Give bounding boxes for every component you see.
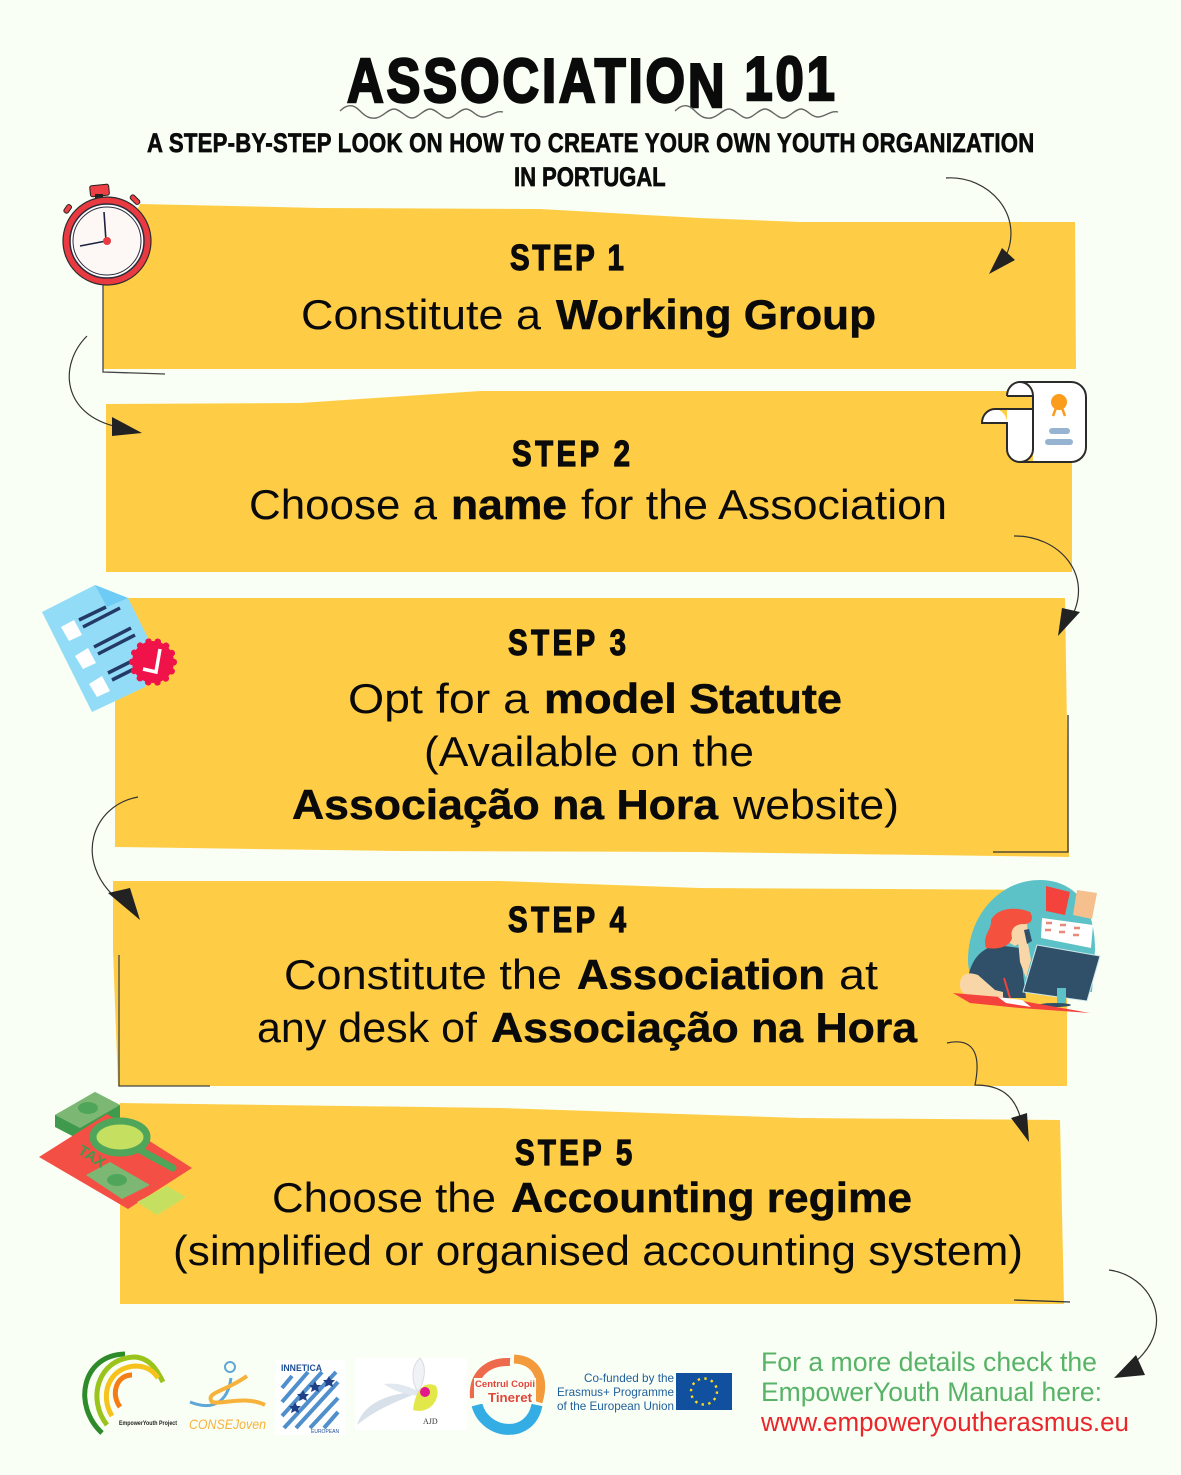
panel: step 4: Associação na Hora [491, 1004, 918, 1051]
panel: step 1: Working Group [556, 291, 876, 338]
panel: step 4: Constitute the [284, 951, 562, 998]
panel: step 3: model Statute [544, 675, 842, 722]
icon: scroll certificate [982, 382, 1086, 462]
icon: tax book with magnifier [39, 1092, 192, 1215]
logo: AJD [355, 1358, 467, 1430]
arrow: step 2 to step 3 [1014, 536, 1080, 636]
logo: EmpowerYouth Project: EmpowerYouth Project [119, 1421, 177, 1427]
logo: Centrul de Copii si Tineret: Tineret [488, 1390, 533, 1405]
panel: step 5 [120, 1103, 1070, 1304]
icon: stopwatch [63, 184, 151, 285]
panel: step 2: Choose a [249, 481, 438, 528]
panel: step 3 [115, 598, 1069, 857]
title [340, 45, 838, 121]
panel: step 1: Constitute a [301, 291, 542, 338]
title: ASSOCIATIO [347, 47, 685, 116]
panel: step 4: Association [577, 951, 825, 998]
panel: step 3: Opt for a [348, 675, 530, 722]
arrow: step 3 to step 4 [92, 797, 140, 920]
panel: step 3: STEP 3 [508, 622, 626, 663]
arrow: title to step 1 [946, 178, 1015, 274]
panel: step 2: STEP 2 [512, 433, 630, 474]
logo: Centrul de Copii si Tineret: Centrul Copii [475, 1379, 535, 1389]
panel: step 4: any desk of [257, 1004, 477, 1051]
arrow: step 5 to footer [1109, 1270, 1157, 1378]
panel: step 2: name [451, 481, 567, 528]
footer note: www.empoweryoutherasmus.eu [760, 1407, 1129, 1437]
logo: Innetica: INNETICA [281, 1363, 322, 1373]
panel: step 5: Accounting regime [511, 1174, 912, 1221]
logo: Erasmus+ co-funded: Erasmus+ Programme [557, 1385, 674, 1399]
icon: woman at desk [953, 880, 1100, 1013]
subtitle: A STEP-BY-STEP LOOK ON HOW TO CREATE YOUR OWN YOUTH ORGANIZATION [147, 129, 1034, 159]
panel: step 3: (Available on the [424, 728, 754, 775]
logo: Consejoven: CONSEJoven [189, 1416, 266, 1432]
panel: step 5: STEP 5 [515, 1132, 632, 1173]
logo: Erasmus+ co-funded [557, 1371, 732, 1413]
title: N [688, 52, 725, 121]
subtitle: IN PORTUGAL [514, 163, 666, 193]
footer note: EmpowerYouth Manual here: [761, 1377, 1102, 1407]
footer note [760, 1347, 1129, 1437]
logo: Erasmus+ co-funded: Co-funded by the [584, 1371, 674, 1385]
panel: step 2: for the Association [581, 481, 947, 528]
icon: checklist with badge [42, 585, 174, 712]
panel: step 3: website) [732, 781, 899, 828]
panel: step 1 [103, 204, 1076, 374]
icon: tax book with magnifier: TAX [75, 1142, 108, 1172]
arrow: step 4 to step 5 [947, 1042, 1029, 1142]
footer note: For a more details check the [761, 1347, 1097, 1377]
logo: Centrul de Copii si Tineret [474, 1359, 541, 1429]
logo: Innetica [275, 1360, 345, 1435]
panel: step 4: STEP 4 [508, 899, 627, 940]
arrow: step 1 to step 2 [69, 336, 142, 436]
logo: AJD: AJD [423, 1417, 438, 1426]
panel: step 5: (simplified or organised accounting system) [173, 1227, 1023, 1274]
panel: step 4: at [839, 951, 878, 998]
logo: Innetica: EUROPEAN [311, 1429, 339, 1435]
panel: step 4 [113, 881, 1067, 1086]
logo: Consejoven [189, 1362, 266, 1432]
panel: step 2 [106, 391, 1072, 572]
subtitle [147, 129, 1034, 193]
panel: step 5: Choose the [272, 1174, 496, 1221]
panel: step 3: Associação na Hora [292, 781, 719, 828]
panel: step 1: STEP 1 [510, 237, 624, 278]
logo: Erasmus+ co-funded: of the European Union [557, 1399, 674, 1413]
title: 101 [727, 45, 835, 114]
logo: EmpowerYouth Project [85, 1354, 177, 1433]
